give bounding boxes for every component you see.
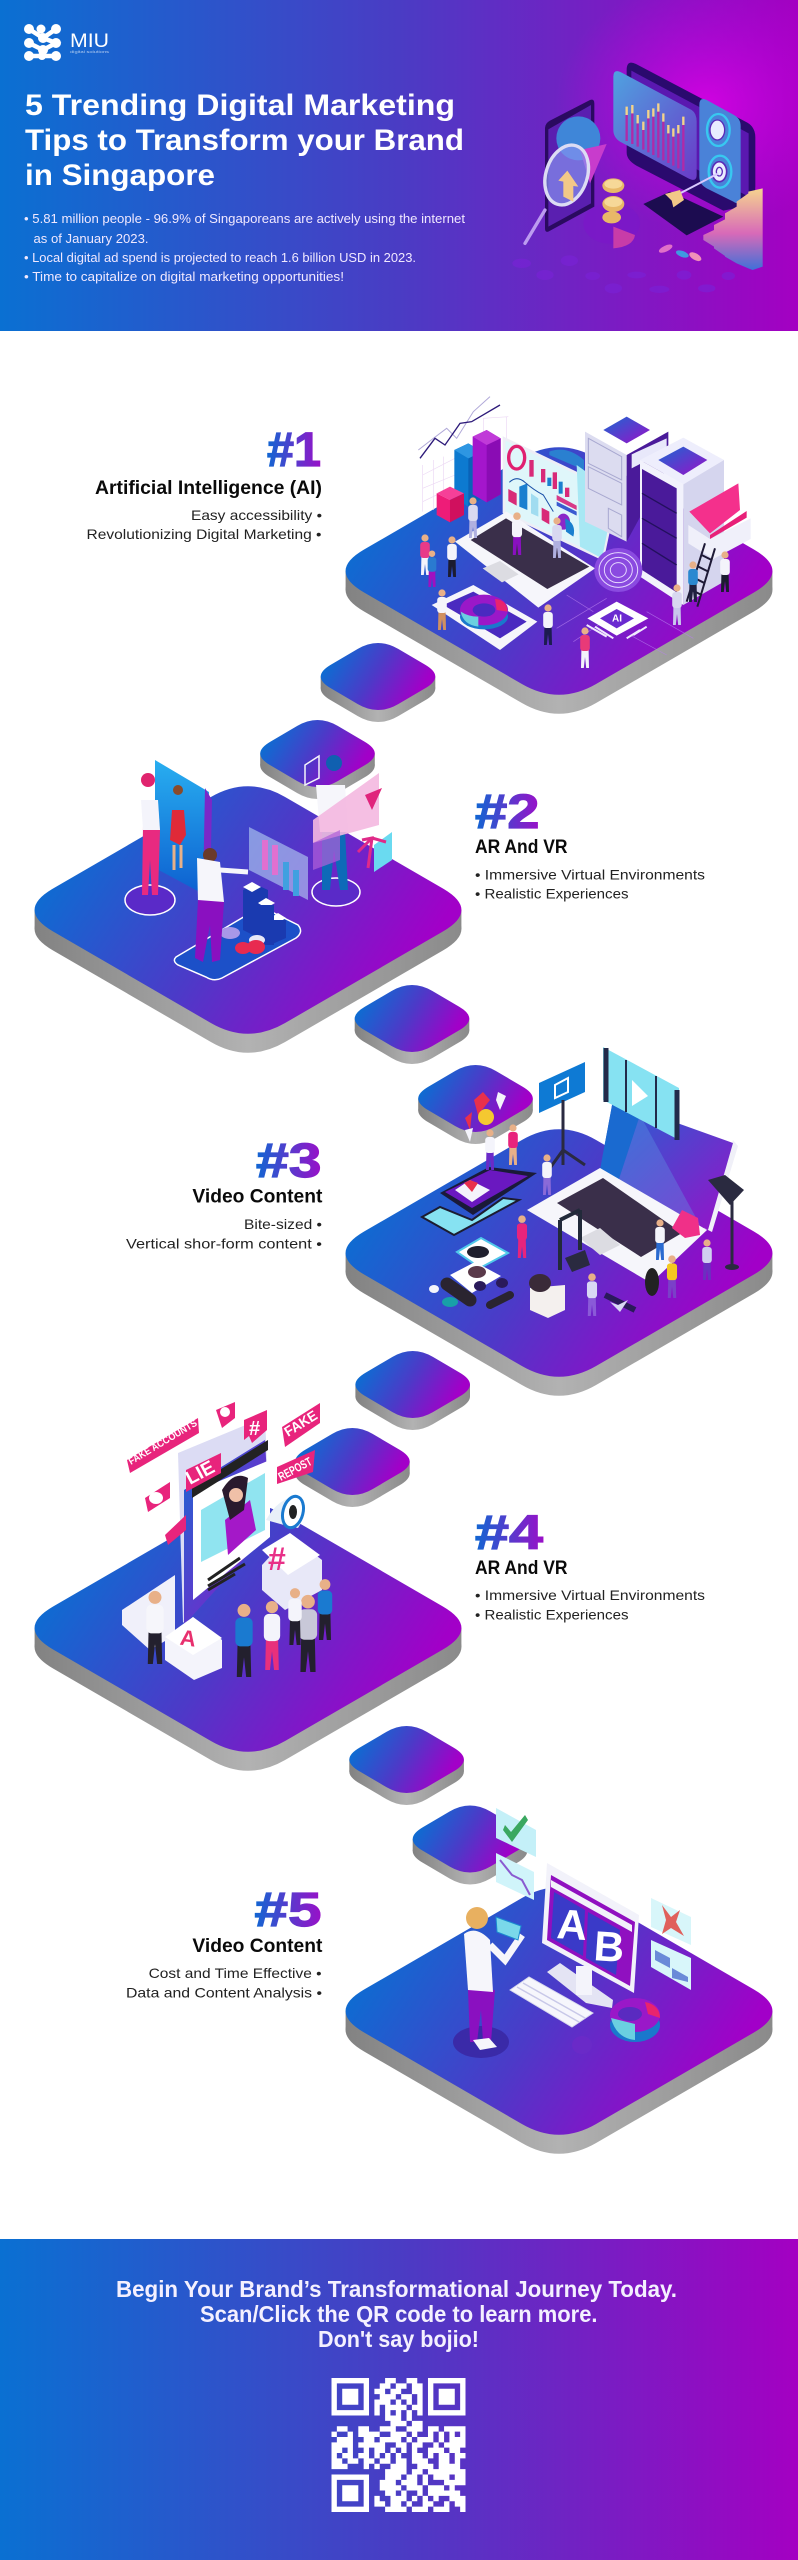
text block step 4: • Immersive Virtual Environments (475, 1587, 705, 1603)
keyboard (510, 1977, 593, 2027)
text block step 5: Cost and Time Effective • (149, 1965, 322, 1981)
text block step 5: Data and Content Analysis • (126, 1985, 322, 2001)
tags (127, 1402, 320, 1545)
text block step 3: #3 (256, 1135, 322, 1188)
title: Tips to Transform your Brand (25, 124, 464, 157)
footer banner (0, 2239, 798, 2560)
step 3 platform (346, 1129, 772, 1396)
intro bullets: as of January 2023. (34, 231, 148, 246)
step 1 platform (346, 447, 772, 714)
monitor (542, 1863, 639, 1993)
step 5 platform (346, 1887, 772, 2154)
illustration step 5: A/B testing: B (592, 1922, 626, 1971)
phone with heart (440, 1167, 537, 1215)
chart columns (243, 882, 286, 945)
illustration step 2: AR and VR (125, 755, 392, 980)
small tile between 2 and 3 (355, 985, 469, 1064)
header illustration: analytics monitor (512, 63, 763, 293)
tags: REPOST (276, 1454, 315, 1484)
logo (24, 24, 109, 61)
small tile between 1 and 2 (321, 643, 435, 722)
tags: FAKE ACCOUNTS (127, 1418, 200, 1468)
illustration step 4: social media (122, 1402, 332, 1680)
letter A stack (165, 1617, 222, 1680)
text block step 2: AR And VR (475, 837, 568, 858)
intro bullets: • Time to capitalize on digital marketing opportunities! (24, 269, 344, 284)
text block step 1: Easy accessibility • (191, 507, 322, 523)
text block step 1: Revolutionizing Digital Marketing • (86, 526, 322, 542)
intro bullets: • 5.81 million people - 96.9% of Singaporeans are actively using the internet (24, 211, 465, 226)
text block step 3: Video Content (192, 1187, 323, 1208)
small tile upper step 3 (418, 1065, 533, 1144)
illustration step 1: AI: AI (612, 614, 622, 625)
text block step 4: • Realistic Experiences (475, 1606, 628, 1622)
small tile upper step 2 (260, 720, 375, 799)
text block step 2: • Realistic Experiences (475, 886, 628, 902)
illustration step 1: AI (418, 397, 751, 668)
call to action: Scan/Click the QR code to learn more. (200, 2301, 598, 2327)
tags: FAKE (281, 1407, 320, 1440)
small tile upper step 5 (413, 1806, 527, 1884)
man centre (195, 848, 248, 962)
text block step 4: AR And VR (475, 1558, 568, 1579)
donut (610, 2008, 660, 2042)
logo: MIU (70, 31, 109, 52)
VR man (312, 878, 360, 906)
text block step 5: Video Content (192, 1936, 323, 1957)
title: 5 Trending Digital Marketing (25, 89, 455, 122)
text block step 2 (475, 786, 705, 902)
people (420, 497, 730, 668)
small tile between 4 and 5 (349, 1726, 464, 1805)
man with tablet (453, 2026, 509, 2058)
text block step 2: • Immersive Virtual Environments (475, 866, 705, 882)
call to action: Don't say bojio! (318, 2326, 479, 2352)
step 4 platform (35, 1504, 461, 1771)
title (25, 89, 464, 192)
header banner (0, 0, 798, 331)
text block step 1: #1 (267, 424, 321, 477)
tags: # (249, 1418, 260, 1440)
intro bullets (24, 211, 465, 284)
left stack (122, 1575, 175, 1650)
illustration step 5: A/B testing: A (555, 1900, 589, 1949)
text block step 3 (126, 1135, 323, 1252)
title: in Singapore (25, 159, 215, 192)
text block step 4: #4 (475, 1507, 543, 1560)
text block step 5: #5 (254, 1884, 322, 1937)
letter A stack: A (179, 1625, 198, 1652)
text block step 5 (126, 1884, 323, 2001)
text block step 1 (86, 424, 322, 542)
step 2 platform (35, 786, 461, 1053)
hashtag stack (262, 1533, 322, 1610)
floating chart (249, 827, 308, 900)
people (146, 1579, 332, 1677)
call to action: Begin Your Brand’s Transformational Journey Today. (116, 2276, 677, 2302)
small tile between 3 and 4 (355, 1351, 470, 1430)
text block step 3: Bite-sized • (244, 1216, 322, 1232)
QR code (332, 2381, 466, 2509)
text block step 4 (475, 1507, 705, 1622)
camera gear (447, 1284, 470, 1300)
logo: digital solutions (70, 49, 109, 54)
call to action (116, 2276, 677, 2352)
text block step 2: #2 (475, 786, 540, 839)
tags: LIE (182, 1457, 218, 1489)
text block step 3: Vertical shor-form content • (126, 1236, 322, 1252)
floor phone (174, 908, 301, 980)
illustration step 5: A/B testing (453, 1808, 691, 2058)
small tile upper step 4 (295, 1428, 410, 1507)
people (485, 1124, 712, 1316)
intro bullets: • Local digital ad spend is projected to reach 1.6 billion USD in 2023. (24, 250, 416, 265)
photos (457, 1238, 508, 1268)
text block step 1: Artificial Intelligence (AI) (95, 478, 322, 499)
reactions on tile (465, 1092, 506, 1142)
hashtag stack: # (268, 1541, 286, 1577)
illustration step 3: video (422, 1047, 744, 1318)
